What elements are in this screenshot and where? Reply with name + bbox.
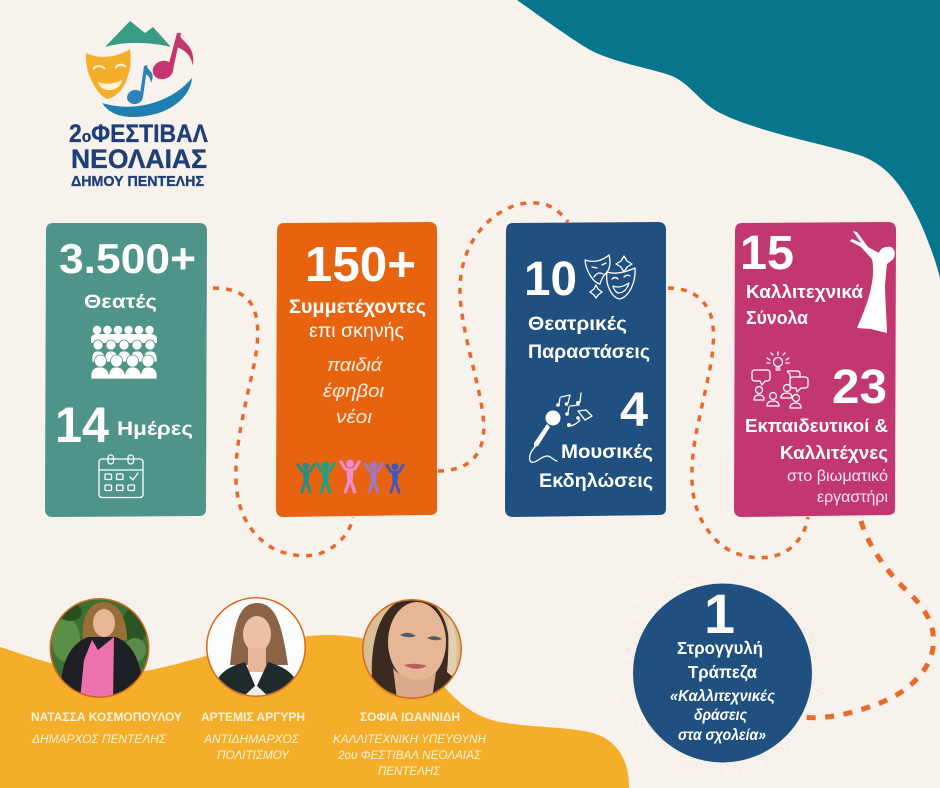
stat: 4: 4	[620, 384, 648, 437]
label: age groups: νέοι	[336, 406, 372, 427]
person: Sofia Ioannidi	[333, 598, 486, 778]
label: round table	[677, 638, 763, 683]
person: Natassa Kosmopoulou	[31, 598, 182, 746]
name: ΝΑΤΑΣΣΑ ΚΟΣΜΟΠΟΥΛΟΥ	[31, 712, 182, 724]
logo: wordmark: 2οΦΕΣΤΙΒΑΛ	[69, 120, 208, 148]
icon: microphone and notes	[530, 393, 592, 462]
stat: 1: 1	[704, 582, 735, 645]
decorative teal corner shape	[517, 0, 940, 278]
label: workshop note	[787, 468, 888, 506]
icon: workshop discussion	[752, 352, 808, 408]
person: Artemis Argyri	[201, 597, 306, 762]
panel: round table	[633, 582, 812, 762]
label: theatre performances: Θεατρικές	[528, 313, 627, 335]
dashed connector: card 1 to card 2	[213, 288, 353, 556]
stat: 3.500+ viewers: 3.500+	[59, 235, 196, 282]
portrait 3	[362, 598, 462, 699]
speckle around round table	[599, 550, 846, 788]
label: artistic groups: Σύνολα	[746, 307, 809, 328]
dashed connector: card 3 to card 4	[668, 288, 808, 558]
stat: 14: 14	[55, 397, 109, 453]
role: ΑΝΤΙΔΗΜΑΡΧΟΣ	[203, 732, 300, 746]
stat: 15: 15	[740, 227, 794, 280]
name: ΑΡΤΕΜΙΣ ΑΡΓΥΡΗ	[201, 712, 305, 724]
label: theatre performances: Παραστάσεις	[528, 341, 650, 363]
label: music events: Μουσικές	[561, 441, 653, 463]
label: age groups: έφηβοι	[323, 380, 384, 401]
icon: audience	[91, 326, 157, 379]
stat: 10: 10	[524, 253, 577, 306]
logo: pink note	[150, 32, 193, 82]
label: music events: Εκδηλώσεις	[539, 470, 653, 492]
role	[333, 732, 486, 778]
label: age groups: παιδιά	[327, 354, 382, 375]
logo: wordmark: ΔΗΜΟΥ ΠΕΝΤΕΛΗΣ	[71, 173, 204, 190]
icon: calendar	[99, 455, 143, 498]
stat: 23: 23	[832, 361, 887, 414]
label: artistic groups: Καλλιτεχνικά	[746, 281, 864, 302]
role	[203, 732, 300, 762]
icon: people row	[298, 460, 403, 492]
logo: theatre mask	[86, 49, 131, 99]
logo: wordmark	[69, 120, 208, 190]
portrait 1	[50, 598, 150, 700]
label: round table title	[670, 688, 776, 744]
role: ΚΑΛΛΙΤΕΧΝΙΚΗ ΥΠΕΥΘΥΝΗ	[333, 732, 486, 746]
icon: dancer silhouette	[850, 231, 895, 333]
panel: audience and days	[45, 223, 207, 517]
label: viewers: Θεατές	[84, 292, 157, 313]
role: ΠΕΝΤΕΛΗΣ	[378, 764, 441, 778]
label: round table: Στρογγυλή	[677, 638, 763, 658]
panel: artistic groups and educators	[734, 222, 896, 517]
logo: mountain	[105, 21, 171, 47]
panel: theatre and music	[505, 222, 666, 517]
logo: blue note	[125, 65, 153, 106]
role: ΠΟΛΙΤΙΣΜΟΥ	[217, 748, 290, 762]
logo	[69, 21, 208, 190]
label: educators and artists	[745, 415, 888, 463]
dashed connector: card 2 to card 3	[438, 203, 568, 471]
label: participants on stage: Συμμετέχοντες	[289, 297, 426, 318]
label: days: Ημέρες	[117, 418, 193, 440]
role: 2ου ΦΕΣΤΙΒΑΛ ΝΕΟΛΑΙΑΣ	[337, 748, 482, 762]
label: educators and artists: Εκπαιδευτικοί &	[745, 415, 888, 436]
label: workshop note: εργαστήρι	[817, 489, 888, 506]
logo: swoosh	[102, 78, 192, 117]
label: participants on stage	[289, 297, 426, 342]
label: round table: Τράπεζα	[688, 662, 757, 683]
label: round table title: δράσεις	[694, 707, 748, 724]
portrait 2	[206, 597, 306, 697]
label: age groups	[323, 354, 384, 427]
label: participants on stage: επι σκηνής	[309, 321, 404, 342]
label: workshop note: στο βιωματικό	[787, 468, 888, 485]
label: artistic groups	[746, 281, 864, 328]
label: round table title: «Καλλιτεχνικές	[670, 688, 776, 705]
label: music events	[539, 441, 653, 492]
label: theatre performances	[528, 313, 650, 363]
label: educators and artists: Καλλιτέχνες	[780, 442, 888, 463]
icon: theatre masks	[585, 255, 635, 299]
name: ΣΟΦΙΑ ΙΩΑΝΝΙΔΗ	[360, 712, 460, 724]
panel: participants	[276, 222, 437, 517]
logo: wordmark: ΝΕΟΛΑΙΑΣ	[71, 144, 207, 174]
dashed connector: card 4 to round table	[803, 521, 933, 718]
decorative yellow bottom wave	[0, 635, 629, 788]
label: round table title: στα σχολεία»	[678, 727, 766, 744]
role: ΔΗΜΑΡΧΟΣ ΠΕΝΤΕΛΗΣ	[31, 732, 167, 746]
stat: 150+: 150+	[305, 238, 416, 292]
